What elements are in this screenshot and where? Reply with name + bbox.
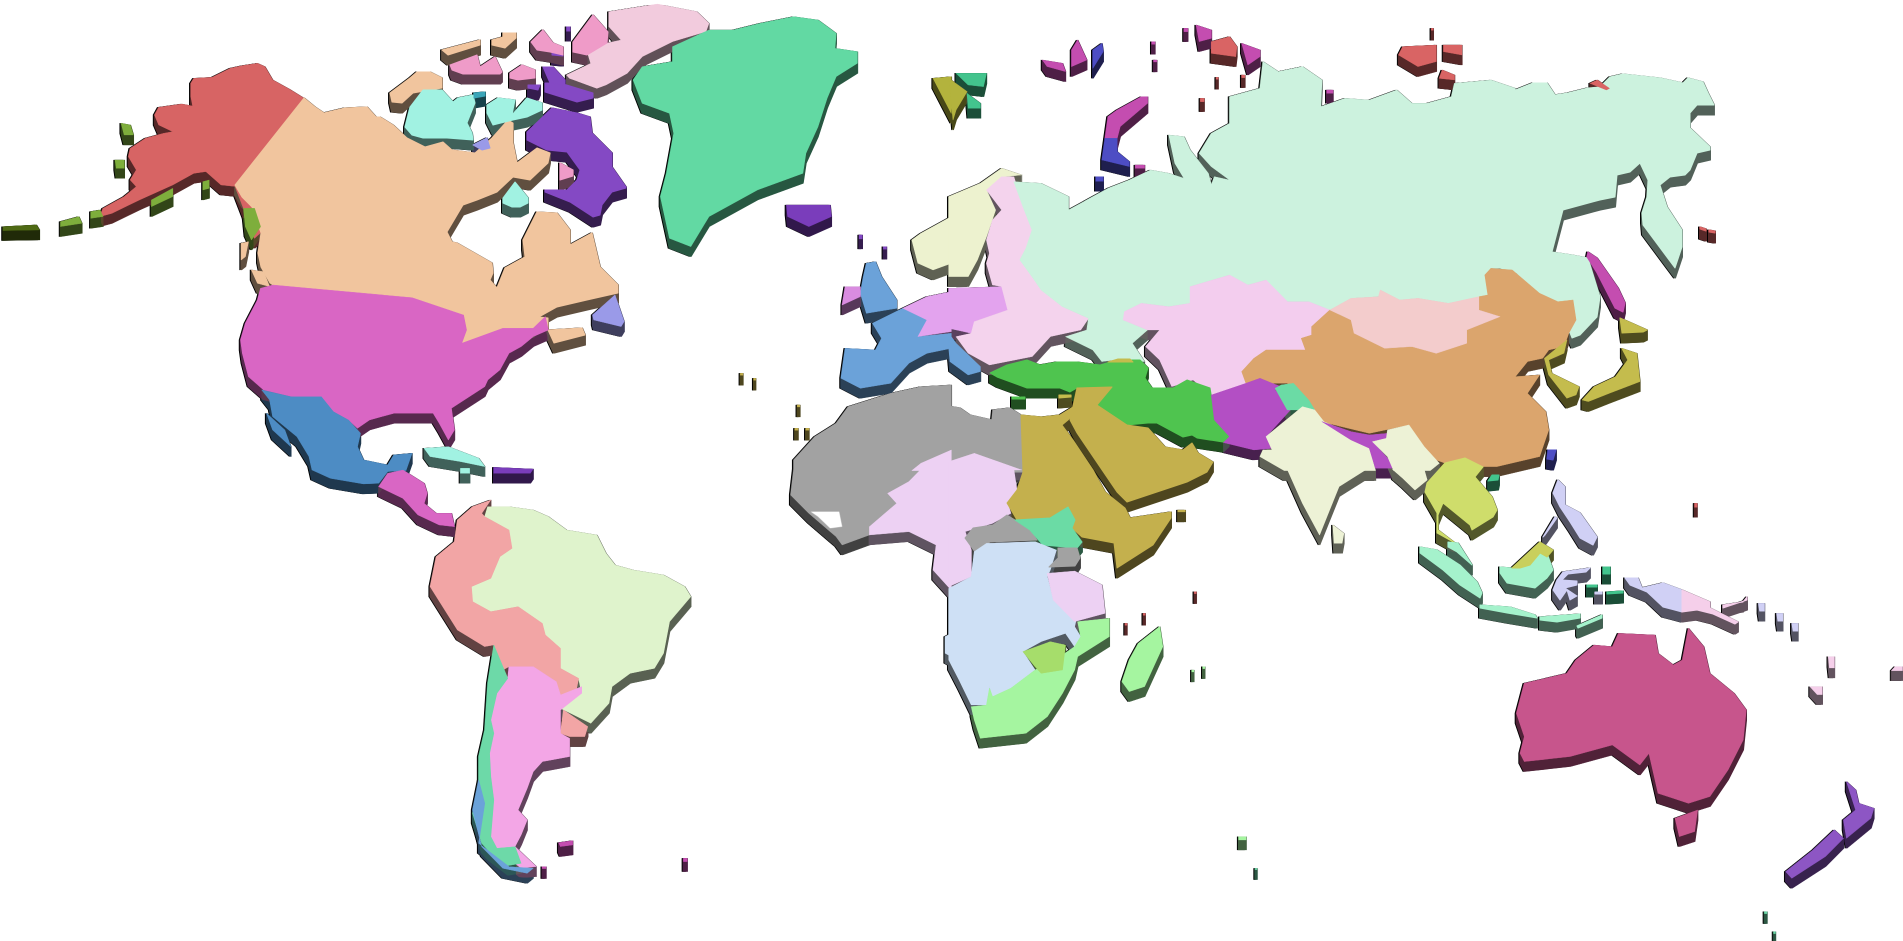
Taiwan <box>1547 450 1556 460</box>
Arabia <box>1070 387 1213 502</box>
Afghanistan Pakistan <box>1211 378 1290 450</box>
Tasmania <box>1675 810 1698 837</box>
Caribbean islands <box>424 447 533 473</box>
Ireland <box>842 287 860 305</box>
Maritime Southeast Asia <box>1420 480 1747 628</box>
Japan <box>1582 318 1647 402</box>
Baffin and Devon islands <box>527 50 626 217</box>
Hainan <box>1488 475 1499 481</box>
Kazakhstan Central Asia <box>1123 275 1330 395</box>
Southern Africa <box>971 618 1109 738</box>
Java and Lesser Sunda <box>1480 605 1602 628</box>
Borneo <box>1500 542 1553 588</box>
Congo and Angola <box>945 542 1081 705</box>
New Siberian islands <box>1399 45 1715 233</box>
Senegal coast gap <box>811 512 842 528</box>
United States <box>241 285 548 440</box>
Arctic Eurasian islands <box>933 25 1715 233</box>
Turkey Iran Caucasus <box>990 360 1230 442</box>
Philippines <box>1543 480 1597 545</box>
Small islands <box>542 27 1902 934</box>
North America <box>3 4 709 527</box>
Zimbabwe <box>1023 642 1065 673</box>
Sulawesi <box>1553 568 1590 600</box>
Scandinavia <box>912 168 1022 277</box>
United Kingdom <box>860 262 897 313</box>
Nepal Bangladesh <box>1322 422 1394 468</box>
Severnaya Zemlya <box>1196 25 1260 65</box>
Europe <box>841 168 1089 388</box>
Tierra del Fuego <box>473 780 533 873</box>
Germany Central Europe <box>903 287 1008 337</box>
Russia <box>1014 62 1714 362</box>
Africa <box>791 385 1171 738</box>
China <box>1242 268 1576 467</box>
Canada <box>235 33 618 343</box>
Sumatra <box>1420 547 1482 598</box>
Alaska coast islands <box>3 123 261 240</box>
Northeast Africa <box>1007 388 1171 568</box>
Ellesmere island <box>567 4 709 88</box>
France Spain Italy <box>841 308 980 388</box>
Central African grey region <box>965 515 1037 552</box>
New Guinea west <box>1625 578 1682 612</box>
Western Himalaya region <box>1275 383 1315 410</box>
Papua New Guinea <box>1682 590 1747 624</box>
Southeast Asia mainland <box>1425 458 1497 543</box>
Franz Josef Land <box>1042 40 1103 72</box>
Myanmar <box>1372 425 1439 490</box>
Falkland Islands <box>559 841 573 847</box>
South Sudan <box>1015 507 1082 548</box>
New Zealand <box>1786 782 1874 878</box>
West and Central Africa <box>869 450 1022 590</box>
Greenland <box>633 17 857 247</box>
Central America <box>379 470 454 527</box>
Chile <box>473 645 521 867</box>
Mongolia <box>1330 290 1500 353</box>
Argentina <box>490 667 582 868</box>
Arctic islands: teal <box>405 90 542 207</box>
Iceland <box>786 205 831 227</box>
Sakhalin <box>1587 252 1625 312</box>
Georgia <box>1108 359 1133 362</box>
Uruguay <box>560 710 588 737</box>
Maluku islands <box>1587 567 1623 594</box>
Eastern Europe <box>956 177 1089 365</box>
East African grey region <box>1049 548 1080 567</box>
Malay peninsula <box>1448 542 1472 565</box>
Alaska <box>100 63 304 238</box>
Brazil and northern South America <box>471 507 691 723</box>
Andean countries <box>430 500 579 695</box>
Newfoundland <box>593 295 624 327</box>
India <box>1260 407 1375 543</box>
South America <box>430 500 691 873</box>
Asia <box>990 252 1647 543</box>
Australia <box>1516 628 1746 837</box>
Madagascar <box>1122 627 1163 692</box>
Mexico <box>262 390 412 484</box>
Novaya Zemlya <box>1102 97 1148 167</box>
Cyprus and Crete <box>1012 395 1071 399</box>
North Africa <box>791 385 1023 545</box>
Korea <box>1544 340 1579 398</box>
Tanzania <box>1047 571 1105 622</box>
Arctic islands: pink <box>450 15 608 180</box>
Svalbard <box>933 73 986 120</box>
